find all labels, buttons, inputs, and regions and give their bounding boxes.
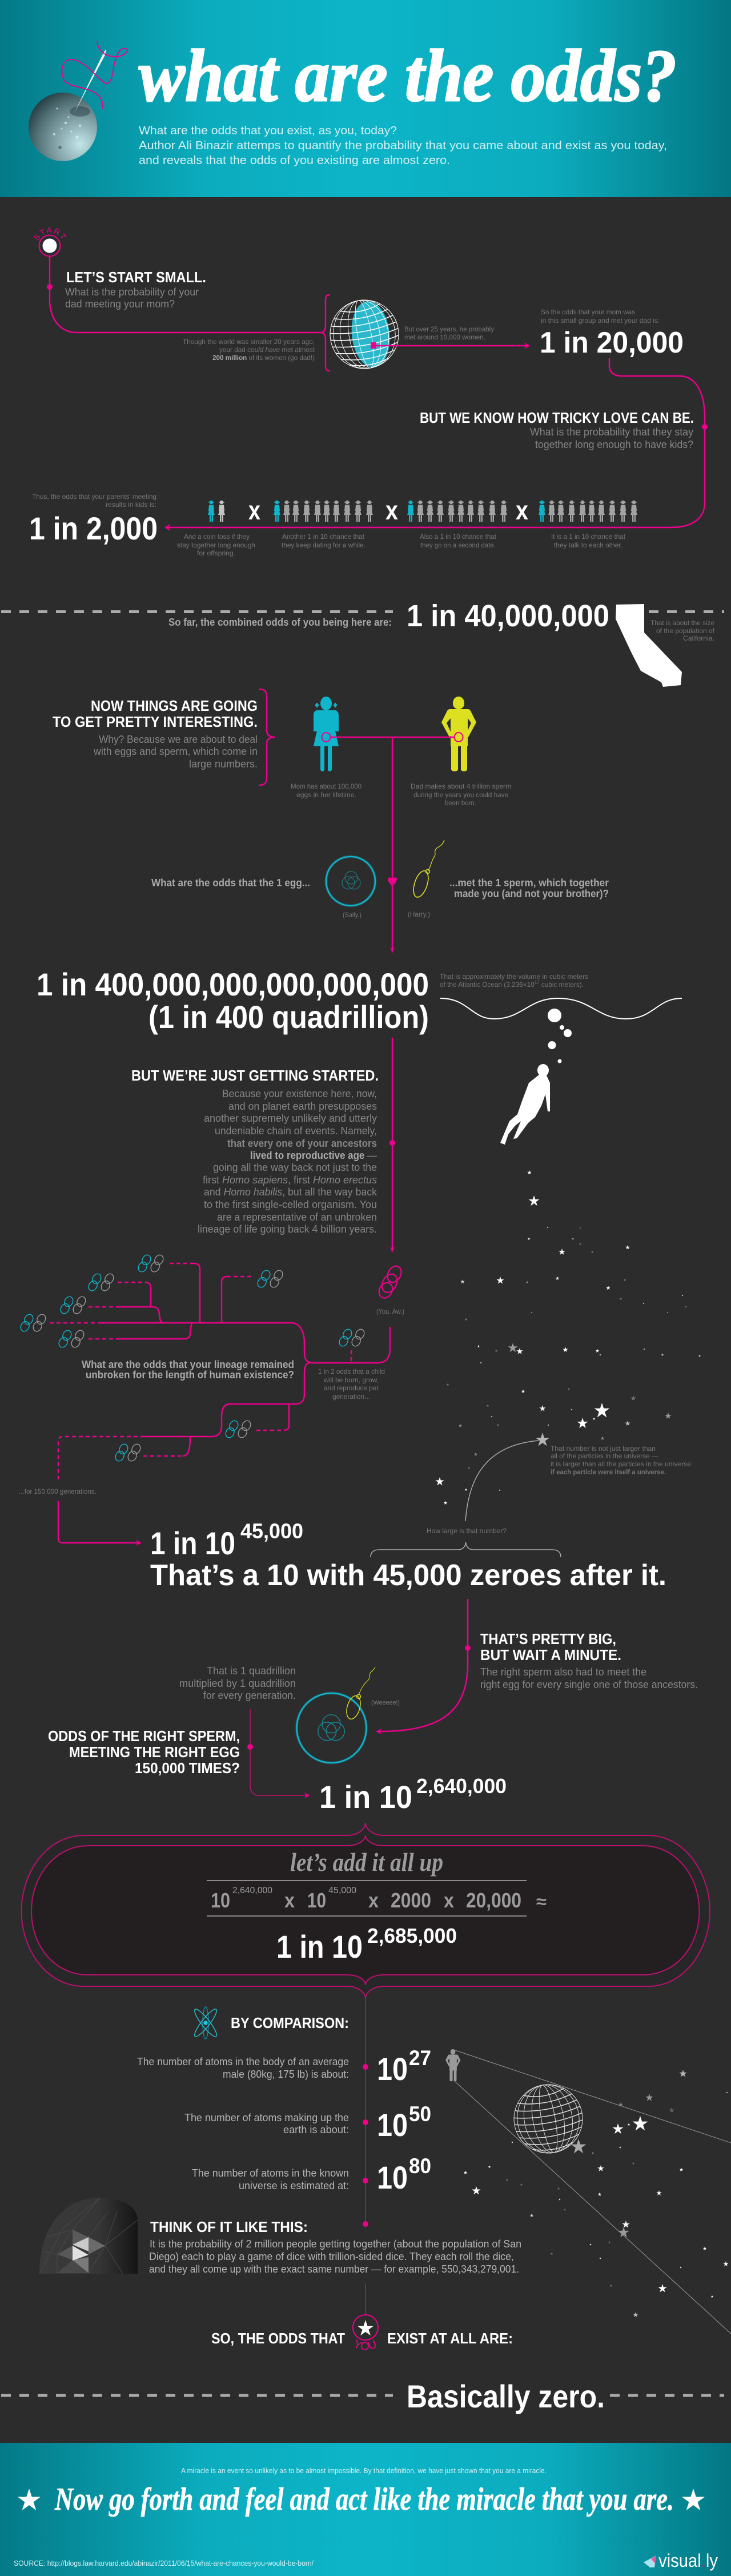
text: atlantic ocean: That is approximately the volume in cubic meters xyxy=(440,973,588,981)
caption: 1 in 2 odds: 1 in 2 odds that a child xyxy=(318,1367,385,1375)
icon: egg with sperm: (Weeeee!) xyxy=(371,1699,400,1706)
text: 10,000 women: met around 10,000 women. xyxy=(404,333,485,341)
connector: comparison spine xyxy=(363,1998,368,2315)
stat: 1 in 10^2,640,000 xyxy=(319,1774,507,1815)
panel heading: let’s add it all up xyxy=(290,1847,443,1877)
header banner xyxy=(0,0,731,197)
heading: pretty big: BUT WAIT A MINUTE. xyxy=(480,1646,621,1663)
paragraph: chain of ancestors: to the first single-celled organism. You xyxy=(204,1199,377,1210)
formula: 10 xyxy=(211,1889,230,1912)
caption: 1 in 2 odds: and reproduce per xyxy=(324,1384,379,1392)
text: quadrillion xyxy=(179,1665,296,1701)
stat: 1 in 10^45,000: That’s a 10 with 45,000 zeroes after it. xyxy=(150,1559,666,1592)
caption: 1 in 2 odds: generation... xyxy=(332,1393,370,1401)
heading: let's start small: What is the probability of your xyxy=(65,286,199,298)
panel total xyxy=(276,1924,457,1965)
text: lineage question: What are the odds that your lineage remained xyxy=(82,1359,294,1370)
text: met the sperm: ...met the 1 sperm, which together xyxy=(449,877,609,889)
heading: pretty big: THAT’S PRETTY BIG, xyxy=(480,1630,616,1647)
heading: pretty interesting: Why? Because we are about to deal xyxy=(99,734,258,745)
heading: let's start small: LET’S START SMALL. xyxy=(66,269,206,286)
brace: interesting xyxy=(259,689,275,785)
icon: wireframe earth xyxy=(508,2079,588,2159)
captions under couples: they keep dating for a while. xyxy=(282,541,366,549)
heading: tricky love: What is the probability that they stay xyxy=(530,426,693,438)
stat: 1 in 2,000 xyxy=(29,493,158,546)
heading: odds of right sperm: ODDS OF THE RIGHT SPERM, xyxy=(48,1727,240,1745)
icon: ocean wave xyxy=(440,998,682,1019)
heading: pretty interesting xyxy=(53,697,258,770)
paragraph: chain of ancestors: lineage of life going back 4 billion years. xyxy=(198,1223,377,1235)
pictogram row: couples: x xyxy=(248,495,260,525)
connector: start to globe xyxy=(47,257,330,371)
you badge xyxy=(352,2314,379,2350)
paragraph: chain of ancestors: undeniable chain of events. Namely, xyxy=(215,1125,377,1137)
divider with combined odds: So far, the combined odds of you being here are: xyxy=(168,617,392,628)
comparison: body atoms: male (80kg, 175 lb) is about: xyxy=(223,2069,349,2080)
text: quadrillion: for every generation. xyxy=(203,1690,296,1701)
paragraph: chain of ancestors: Because your existence here, now, xyxy=(222,1088,377,1099)
heading: pretty interesting: NOW THINGS ARE GOING xyxy=(91,697,258,714)
starfield lower xyxy=(464,2070,729,2317)
icon: mom figure xyxy=(314,697,339,771)
icon: sperm Harry: (Harry.) xyxy=(408,910,430,918)
captions: mom and dad: been born. xyxy=(445,799,476,807)
heading: so the odds: SO, THE ODDS THAT xyxy=(211,2330,345,2347)
panel total: 2,685,000 xyxy=(367,1924,457,1947)
formula: ≈ xyxy=(536,1893,547,1911)
formula: 2,640,000 xyxy=(232,1886,272,1895)
formula: 20,000 xyxy=(466,1889,521,1912)
caption: 150,000 generations: ...for 150,000 generations. xyxy=(19,1487,97,1495)
callout: how large is that number xyxy=(371,1433,561,1557)
captions: mom and dad: Mom has about 100,000 xyxy=(291,782,362,790)
text: world women: Though the world was smaller 20 years ago, xyxy=(183,338,315,346)
captions: mom and dad xyxy=(291,782,511,807)
text: california caption xyxy=(650,619,715,642)
stat: 1 in 10^2,640,000: 2,640,000 xyxy=(416,1774,507,1798)
arrow: right sperm to 10^2,640,000 xyxy=(247,1709,310,1798)
text: atlantic ocean xyxy=(440,973,588,989)
text: particles in the universe: That number is not just larger than xyxy=(551,1445,656,1453)
comparison: body atoms xyxy=(137,2046,431,2087)
text: particles in the universe: if each particle were itself a universe. xyxy=(551,1468,666,1476)
panel total: 1 in 10 xyxy=(276,1929,363,1965)
heading: pretty interesting: with eggs and sperm, which come in xyxy=(93,746,258,757)
stat: 1 in 10^45,000: 1 in 10 xyxy=(150,1525,235,1561)
paragraph: chain of ancestors: and on planet earth presupposes xyxy=(228,1101,377,1112)
title: what are the odds? xyxy=(139,35,677,117)
text: particles in the universe xyxy=(551,1445,691,1476)
formula: 45,000 xyxy=(328,1886,356,1895)
heading: odds of right sperm: 150,000 TIMES? xyxy=(135,1759,240,1777)
comparison: earth atoms: 10 xyxy=(377,2107,408,2143)
comparison: universe atoms: The number of atoms in the known xyxy=(192,2167,349,2179)
heading: let's start small: dad meeting your mom? xyxy=(65,298,175,310)
stat: 1 in 20,000: 1 in 20,000 xyxy=(540,326,684,359)
divider with basically zero: Basically zero. xyxy=(407,2378,605,2414)
lineage couples xyxy=(19,1254,366,1462)
paragraph: chain of ancestors: that every one of your ancestors xyxy=(227,1138,377,1149)
heading: so the odds: EXIST AT ALL ARE: xyxy=(387,2330,513,2347)
text: particles in the universe: all of the particles in the universe — xyxy=(551,1452,658,1460)
text: california caption: of the population of xyxy=(656,627,715,635)
formula: x xyxy=(444,1889,454,1912)
icon: egg with sperm xyxy=(297,1667,400,1763)
captions under couples: And a coin toss if they xyxy=(184,533,250,541)
stat: 1 in 2,000: results in kids is: xyxy=(106,501,156,509)
text: atlantic ocean: 17 xyxy=(535,980,540,985)
starfield upper xyxy=(435,1170,701,1505)
paragraph: chain of ancestors: are a representative of an unbroken xyxy=(217,1211,377,1223)
start marker: START xyxy=(34,227,66,240)
icon: dad figure xyxy=(441,697,476,771)
text: california caption: California. xyxy=(683,634,714,642)
heading: just getting started: BUT WE’RE JUST GETTING STARTED. xyxy=(131,1067,379,1084)
intro text xyxy=(139,125,667,167)
intro text: What are the odds that you exist, as you, today? xyxy=(139,125,397,137)
captions under couples: they go on a second date. xyxy=(420,541,496,549)
panel: let's add it all up xyxy=(22,1823,710,1998)
icon: you: (You. Aw.) xyxy=(376,1307,404,1315)
stat: 1 in 10^2,640,000: 1 in 10 xyxy=(319,1779,412,1815)
arrow: globe to 1 in 20,000 xyxy=(376,342,530,349)
paragraph: chain of ancestors: lived to reproductive age — xyxy=(250,1150,377,1161)
heading: tricky love: BUT WE KNOW HOW TRICKY LOVE CAN BE. xyxy=(420,409,694,426)
arrow: generations to 10^45000 xyxy=(58,1501,142,1546)
formula: x xyxy=(284,1889,295,1912)
heading: by comparison: BY COMPARISON: xyxy=(231,2014,349,2031)
paragraph: chain of ancestors xyxy=(198,1088,377,1235)
divider with combined odds: 1 in 40,000,000 xyxy=(407,599,609,633)
icon: sperm Harry xyxy=(408,840,444,918)
text: think of it like this: It is the probability of 2 million people getting together (about the population of San xyxy=(150,2238,521,2250)
text: particles in the universe: it is larger than all the particles in the universe xyxy=(551,1460,691,1468)
heading: pretty big xyxy=(480,1630,698,1690)
icon: moon with needle and thread xyxy=(29,41,127,161)
lineage tree lines xyxy=(50,1263,390,1479)
miracle definition: A miracle is an event so unlikely as to be almost impossible. By that definition, we have just shown that you are a miracle. xyxy=(181,2466,547,2475)
icon: california map xyxy=(616,604,682,687)
formula xyxy=(207,1881,547,1916)
formula: 2000 xyxy=(391,1889,431,1912)
comparison: universe atoms: universe is estimated at: xyxy=(239,2180,349,2191)
callout: how large is that number: How large is that number? xyxy=(427,1527,507,1535)
paragraph: chain of ancestors: going all the way back not just to the xyxy=(213,1162,377,1173)
connector: center line to you xyxy=(389,1038,395,1253)
heading: pretty interesting: TO GET PRETTY INTERESTING. xyxy=(53,713,258,730)
captions: mom and dad: during the years you could have xyxy=(413,791,508,799)
stat: 1 in 20,000 xyxy=(540,308,684,359)
heading: pretty big: right egg for every single one of those ancestors. xyxy=(480,1679,698,1690)
text: met the sperm: made you (and not your brother)? xyxy=(454,888,609,899)
caption: 1 in 2 odds: will be born, grow, xyxy=(323,1376,379,1384)
paragraph: chain of ancestors: first Homo sapiens, first Homo erectus xyxy=(203,1174,377,1186)
heading: tricky love xyxy=(420,409,694,450)
stat: 1 in 10^45,000 xyxy=(150,1519,666,1592)
captions: mom and dad: eggs in her lifetime. xyxy=(296,791,356,799)
comparison: body atoms: The number of atoms in the body of an average xyxy=(137,2056,349,2067)
captions under couples: Also a 1 in 10 chance that xyxy=(420,533,497,541)
paragraph: chain of ancestors: another supremely unlikely and utterly xyxy=(204,1113,377,1124)
stat: 1 in 400 quadrillion: (1 in 400 quadrillion) xyxy=(148,999,429,1035)
comparison: universe atoms: 80 xyxy=(409,2154,431,2178)
footer banner xyxy=(0,2443,731,2576)
text: think of it like this xyxy=(149,2218,521,2275)
captions under couples: It is a 1 in 10 chance that xyxy=(551,533,626,541)
heading: pretty interesting: large numbers. xyxy=(189,758,258,770)
captions under couples: they talk to each other. xyxy=(554,541,622,549)
text: atlantic ocean: of the Atlantic Ocean (3.236×10 xyxy=(440,981,536,989)
intro text: and reveals that the odds of you existing are almost zero. xyxy=(139,154,450,167)
formula: x xyxy=(368,1889,379,1912)
icon: you xyxy=(376,1263,404,1315)
comparison: universe atoms xyxy=(192,2154,431,2195)
text: quadrillion: That is 1 quadrillion xyxy=(207,1665,296,1677)
comparison: earth atoms: 50 xyxy=(409,2102,431,2126)
text: odds that the egg: What are the odds that the 1 egg... xyxy=(151,877,310,889)
captions under couples: stay together long enough xyxy=(177,541,255,549)
start marker xyxy=(34,227,66,257)
connector: mom and dad xyxy=(322,733,463,953)
formula: 10 xyxy=(307,1889,326,1912)
text: 10,000 women: But over 25 years, he probably xyxy=(404,325,494,333)
connector: 20,000 to parents xyxy=(164,358,708,531)
logo: visual.ly: visual.ly xyxy=(658,2550,718,2571)
captions under couples: for offspring. xyxy=(197,549,235,557)
text: lineage question xyxy=(82,1359,294,1381)
text: 10,000 women xyxy=(404,325,494,341)
heading: so the odds xyxy=(211,2330,513,2347)
comparison: earth atoms: earth is about: xyxy=(283,2124,349,2135)
pictogram row: couples: x xyxy=(516,495,528,525)
text: world women xyxy=(183,338,315,362)
text: california caption: That is about the size xyxy=(650,619,714,627)
captions under couples: Another 1 in 10 chance that xyxy=(282,533,365,541)
comparison: earth atoms xyxy=(184,2102,431,2143)
divider with combined odds xyxy=(1,599,724,633)
captions under couples xyxy=(177,533,626,557)
icon: egg Sally xyxy=(326,857,375,919)
icon: trillion-sided die xyxy=(39,2198,138,2274)
heading: pretty big: The right sperm also had to meet the xyxy=(480,1666,646,1678)
captions: mom and dad: Dad makes about 4 trillion sperm xyxy=(411,782,511,790)
stat: 1 in 10^45,000: 45,000 xyxy=(240,1519,303,1543)
icon: man and view cone xyxy=(445,2049,731,2334)
stat: 1 in 400 quadrillion: 1 in 400,000,000,000,000,000 xyxy=(37,966,429,1002)
text: world women: your dad could have met almost xyxy=(219,346,315,354)
comparison: earth atoms: The number of atoms making up the xyxy=(184,2112,349,2123)
you badge: YOU xyxy=(356,2339,376,2350)
text: think of it like this: Diego) each to play a game of dice with trillion-sided dice. They each roll the dice, xyxy=(149,2251,514,2262)
comparison: universe atoms: 10 xyxy=(377,2159,408,2195)
text: think of it like this: THINK OF IT LIKE THIS: xyxy=(150,2218,308,2235)
text: lineage question: unbroken for the length of human existence? xyxy=(86,1369,294,1381)
stat: 1 in 2,000: Thus, the odds that your parents’ meeting xyxy=(32,493,156,501)
heading: odds of right sperm xyxy=(48,1727,240,1777)
pictogram row: couples: x xyxy=(385,495,398,525)
comparison: body atoms: 10 xyxy=(377,2051,408,2087)
stat: 1 in 2,000: 1 in 2,000 xyxy=(29,510,158,546)
comparison: body atoms: 27 xyxy=(409,2046,431,2070)
stat: 1 in 20,000: So the odds that your mom was xyxy=(541,308,635,316)
text: world women: 200 million of its women (go dad!) xyxy=(212,354,315,362)
text: atlantic ocean: cubic meters). xyxy=(540,981,584,989)
source: SOURCE: http://blogs.law.harvard.edu/abinazir/2011/06/15/what-are-chances-you-would-be-born/ xyxy=(14,2559,314,2567)
caption: 1 in 2 odds xyxy=(318,1367,385,1401)
stat: 1 in 20,000: in this small group and met your dad is: xyxy=(541,317,660,325)
text: quadrillion: multiplied by 1 quadrillion xyxy=(179,1678,296,1689)
heading: tricky love: together long enough to have kids? xyxy=(535,439,693,450)
paragraph: chain of ancestors: and Homo habilis, but all the way back xyxy=(204,1186,377,1198)
connector: 45,000 to egg xyxy=(376,1599,471,1734)
icon: atom xyxy=(192,2007,219,2039)
pictogram row: couples xyxy=(208,495,637,525)
icon: egg Sally: (Sally.) xyxy=(343,911,362,919)
icon: globe with cyan band xyxy=(324,294,404,374)
intro text: Author Ali Binazir attemps to quantify the probability that you came about and exist as you today, xyxy=(139,139,667,152)
stat: 1 in 400 quadrillion xyxy=(37,966,429,1035)
heading: odds of right sperm: MEETING THE RIGHT EGG xyxy=(69,1743,240,1761)
text: think of it like this: and they all come up with the exact same number — for example, 550,343,279,001. xyxy=(149,2263,519,2275)
icon: diver and bubbles xyxy=(500,1009,572,1145)
text: met the sperm xyxy=(449,877,609,899)
heading: let's start small xyxy=(65,269,206,310)
